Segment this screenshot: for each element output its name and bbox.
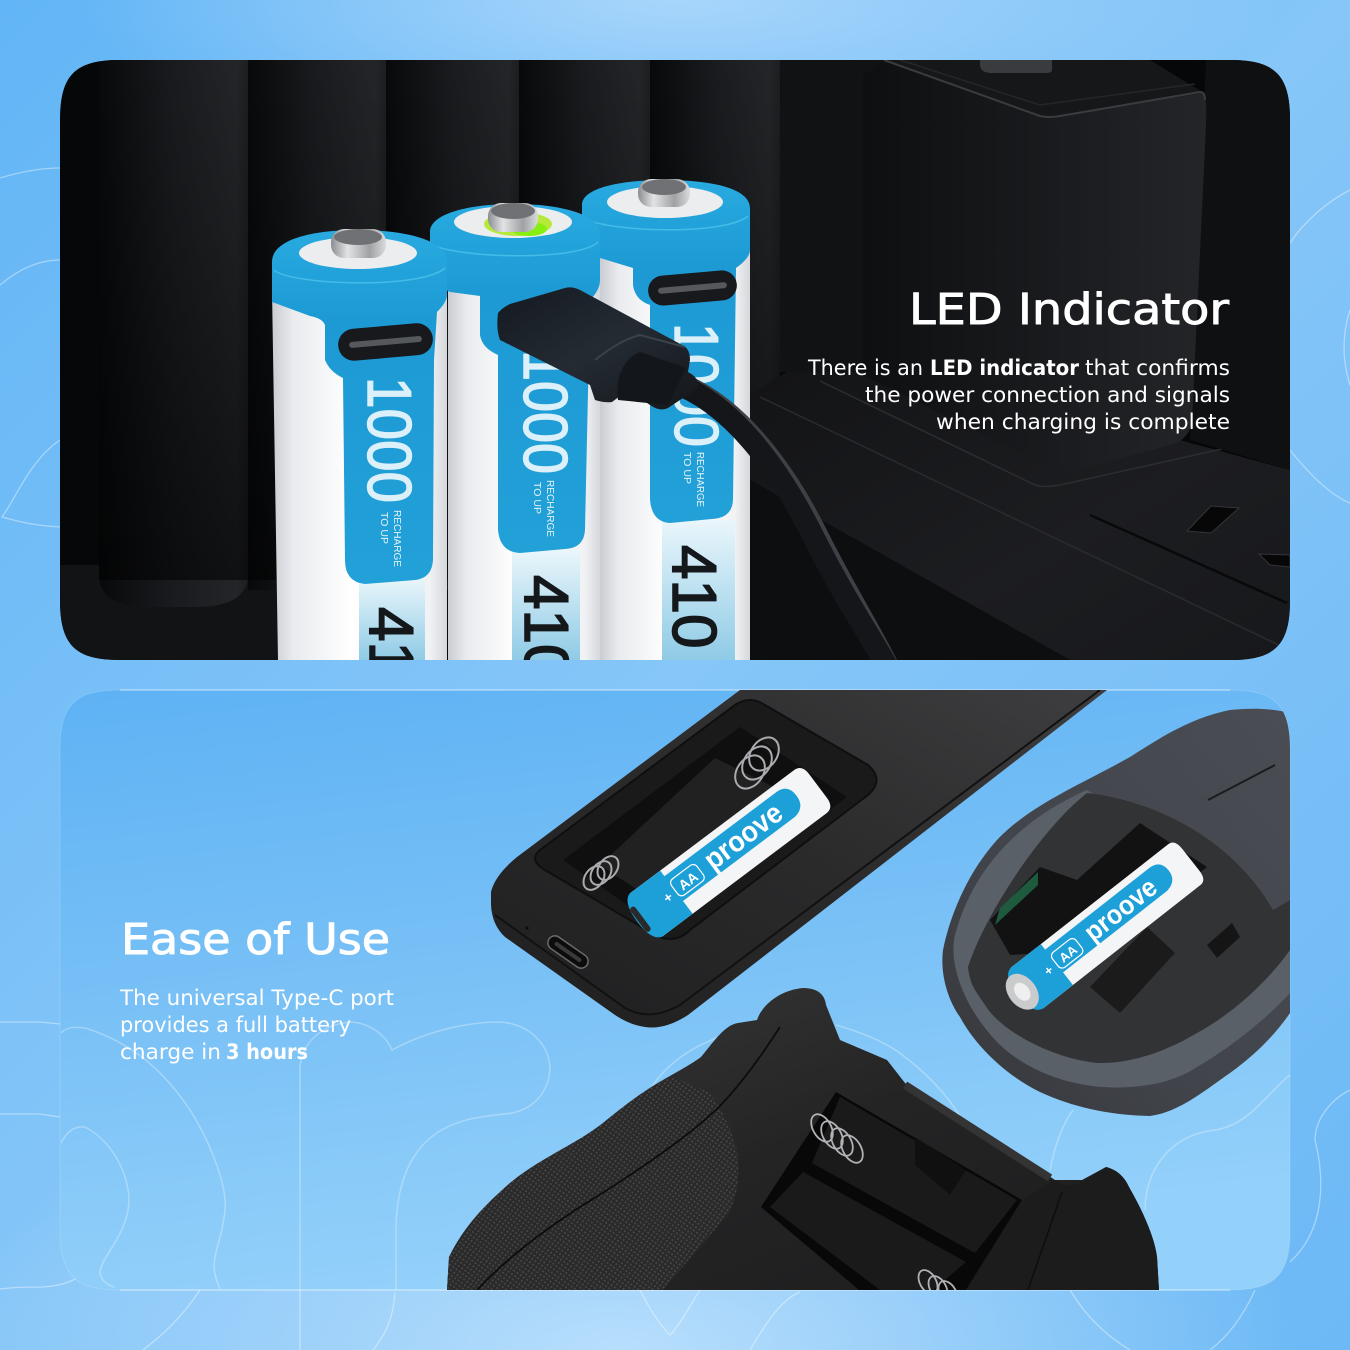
battery middle [430, 203, 600, 678]
text block: LED description: the power connection and signals [865, 383, 1230, 408]
usb-c port remote [547, 935, 589, 969]
heading: Ease of Use: Ease of Use [121, 915, 390, 965]
capacity text left: 1000 [354, 377, 423, 503]
coil springs [579, 732, 785, 894]
battery middle: TO UP [531, 482, 542, 514]
text block: LED description: There is an [807, 356, 923, 381]
text block: LED description: that confirms [1085, 356, 1230, 381]
capacity text right: 1000 [661, 323, 730, 447]
wireless mouse with battery [942, 709, 1290, 1116]
battery middle: 410 [511, 575, 580, 678]
aa battery in remote: AA [675, 868, 701, 893]
game controller [447, 988, 1159, 1308]
mouse rim [953, 790, 1290, 1088]
controller right horn [1104, 1167, 1159, 1290]
aa battery in remote: + [660, 888, 676, 906]
usb-c port right [647, 269, 738, 307]
usb-c port left [337, 322, 434, 362]
green LED glow [484, 212, 552, 236]
mouse upper pit [990, 823, 1207, 955]
battery left [272, 229, 447, 660]
text block: ease of use description: The universal Type-C port [119, 986, 394, 1011]
panel: LED indicator [60, 60, 1290, 710]
battery left: 410 [356, 607, 425, 710]
battery right: RECHARGE [694, 452, 705, 507]
battery right [582, 179, 750, 660]
charger block [780, 60, 1290, 471]
aa battery in mouse [1006, 842, 1204, 1010]
text block: ease of use description [119, 986, 394, 1065]
battery left: RECHARGE [391, 510, 402, 567]
controller body [447, 988, 1159, 1290]
aa battery in remote: proove [698, 797, 789, 877]
battery recess [535, 700, 876, 939]
text block: ease of use description: provides a full battery [120, 1013, 351, 1038]
tv remote with battery [491, 690, 1107, 1028]
remote body [491, 690, 1107, 1028]
panel: ease of use [60, 690, 1290, 1290]
battery middle: RECHARGE [544, 480, 555, 537]
mouse cavity [968, 793, 1290, 1063]
lower battery cell [770, 1172, 966, 1290]
text block: ease of use description: 3 hours [226, 1040, 308, 1065]
heading: LED Indicator: LED Indicator [909, 285, 1229, 335]
text block: LED description: LED indicator [930, 356, 1079, 381]
coil springs controller [810, 1113, 956, 1290]
mouse body [942, 709, 1290, 1116]
battery right: TO UP [681, 452, 692, 484]
battery right: 410 [659, 545, 728, 648]
text block: ease of use description: charge in [120, 1040, 221, 1065]
textured grip [447, 1077, 738, 1290]
aa battery in mouse: + [1041, 962, 1057, 979]
upper battery cell [812, 1097, 1017, 1253]
aa battery in mouse: AA [1056, 942, 1081, 966]
text block: LED description [807, 356, 1230, 435]
aa battery in mouse: proove [1078, 872, 1163, 947]
power strip [750, 345, 1290, 660]
panel background [60, 690, 1290, 1290]
text block: LED description: when charging is complete [936, 410, 1230, 435]
mouse lower pit [1090, 927, 1175, 1013]
usb cable and plug [497, 287, 893, 668]
capacity text middle: 1000 [510, 350, 579, 474]
battery left: TO UP [378, 512, 389, 544]
panel background [60, 60, 1290, 660]
dark background columns [60, 60, 780, 660]
aa battery in remote [621, 764, 834, 943]
battery compartment [761, 1092, 1022, 1290]
